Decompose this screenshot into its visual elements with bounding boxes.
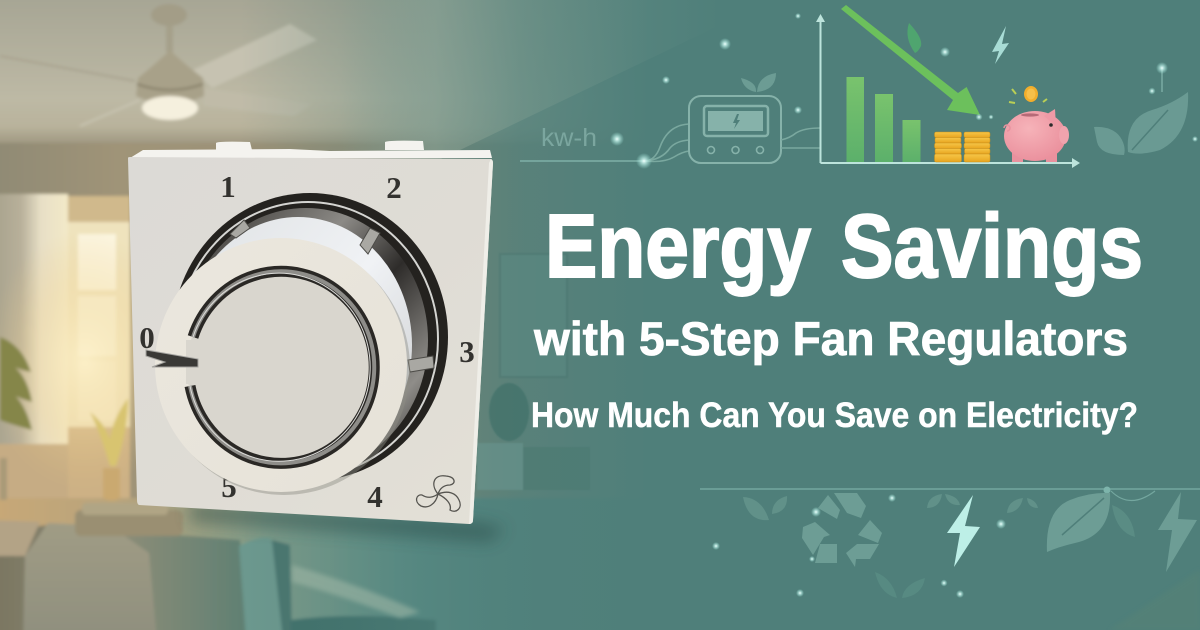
faded leaves top right <box>1094 68 1188 155</box>
meter screen <box>704 106 768 136</box>
heading line 1: Energy <box>545 197 811 297</box>
meter leaves <box>741 73 776 92</box>
label: kw-h: kw-h <box>541 124 597 152</box>
lower decorative eco icons <box>700 486 1200 598</box>
mounting tabs <box>216 141 424 150</box>
wall <box>0 143 650 503</box>
fan icon <box>417 476 460 511</box>
big leaf <box>1047 493 1135 552</box>
bar 3 <box>902 120 920 162</box>
bar 2 <box>875 94 893 162</box>
meter body <box>689 96 781 163</box>
meter bolt <box>733 114 740 129</box>
sofa <box>0 520 252 630</box>
chart axes <box>820 22 1072 163</box>
bright bolt <box>947 495 980 567</box>
switch shadow <box>190 503 505 542</box>
knob front <box>155 238 407 492</box>
dial numbers <box>139 169 475 514</box>
chair <box>239 538 436 630</box>
knob inner disc <box>187 273 371 463</box>
outer chrome ring <box>172 193 448 481</box>
sunlight glow <box>0 230 185 490</box>
fan regulator switch <box>128 141 505 542</box>
chrome ring with gap <box>190 271 374 463</box>
wires into meter <box>644 124 689 162</box>
heading line 2: with 5-Step Fan Regulators <box>533 312 1128 365</box>
room contents <box>0 0 650 630</box>
step 4: 4 <box>367 479 383 514</box>
floor <box>0 498 650 630</box>
ceiling <box>0 0 650 145</box>
pointer slot <box>146 350 198 367</box>
recycle symbol <box>802 493 882 567</box>
curtain base <box>0 444 68 502</box>
throw blanket <box>23 523 157 630</box>
step 5: 5 <box>221 469 237 504</box>
heading line 1 <box>545 197 1143 297</box>
faceplate <box>128 157 493 524</box>
knob cylinder <box>184 217 412 473</box>
plate back rim <box>130 149 492 158</box>
right bolt <box>1158 492 1197 572</box>
ceiling diagonal highlight <box>340 0 720 205</box>
faded leaves <box>743 494 1038 598</box>
network line <box>700 488 1200 490</box>
meter dials <box>708 146 764 154</box>
plate right edge highlight <box>469 159 493 524</box>
bar 1 <box>846 77 864 162</box>
plant left <box>0 337 32 500</box>
kWh meter line art <box>520 73 820 163</box>
curtain <box>0 194 68 444</box>
gap fill <box>186 340 200 384</box>
window <box>68 222 130 501</box>
ceiling fan <box>0 4 317 126</box>
downward arrow <box>841 5 980 115</box>
step 1: 1 <box>220 169 236 204</box>
pale bolt <box>992 26 1009 64</box>
bottom right corner tint <box>1110 570 1200 630</box>
power line <box>520 160 644 162</box>
window wall <box>68 196 130 501</box>
step 0: 0 <box>139 320 155 355</box>
step 2: 2 <box>386 170 402 205</box>
title <box>531 197 1143 435</box>
green leaf <box>907 23 921 53</box>
heading line 1: Savings <box>841 197 1143 297</box>
plant on floor <box>90 398 128 500</box>
wires to chart <box>781 128 820 148</box>
glowing particles <box>610 13 1198 598</box>
coin stack 1 <box>934 132 962 162</box>
coin stack 2 <box>964 132 990 162</box>
wall picture <box>500 254 567 377</box>
books on sofa <box>75 503 183 536</box>
blurred furniture <box>477 383 590 490</box>
knob shadow <box>158 241 410 495</box>
piggy bank <box>1004 109 1069 162</box>
savings chart <box>816 5 1080 168</box>
falling coin <box>1009 86 1047 103</box>
heading line 3: How Much Can You Save on Electricity? <box>531 396 1138 435</box>
floor streak <box>292 565 420 618</box>
chrome clips <box>230 220 434 372</box>
step 3: 3 <box>459 334 475 369</box>
